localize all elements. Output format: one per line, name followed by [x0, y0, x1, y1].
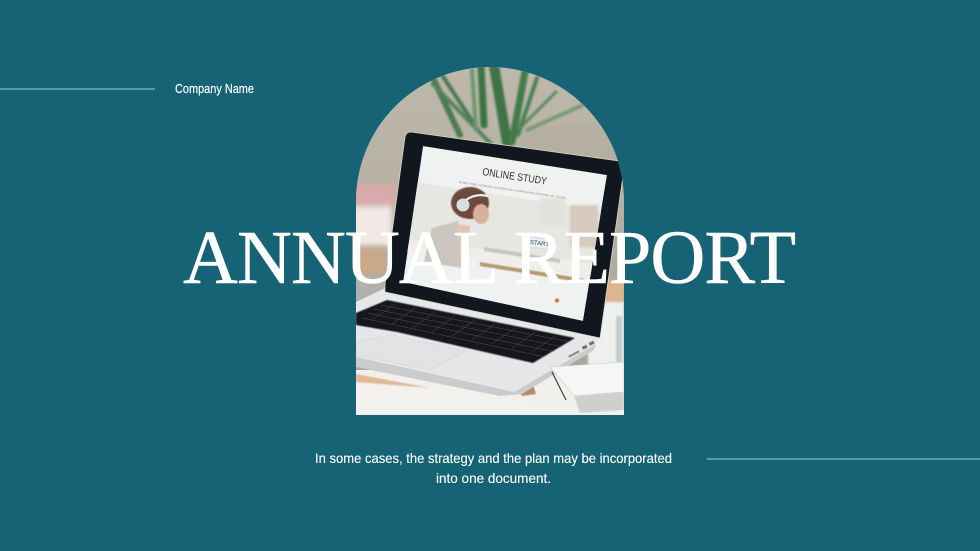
site heading: ONLINE STUDY [482, 166, 548, 188]
laptop lid [385, 132, 624, 338]
photo backdrop [352, 67, 624, 415]
trackpad [356, 335, 465, 370]
laptop base [356, 288, 600, 396]
woman hair [451, 187, 489, 219]
orange dot [555, 298, 559, 303]
description text: In some cases, the strategy and the plan may be incorporated [315, 450, 672, 466]
notebook [550, 362, 624, 413]
site navigation: HOME FREE COURSES SCHEDULED COURSES EDUCATORS MY STUDY [459, 180, 566, 200]
keyboard [356, 300, 575, 363]
woman body [424, 221, 462, 268]
top left divider line [0, 88, 155, 90]
description text: into one document. [436, 470, 551, 486]
cover slide [0, 67, 980, 483]
site photo: START [530, 240, 550, 249]
company name: Company Name [175, 81, 254, 96]
ports [568, 350, 580, 358]
headphones [456, 198, 470, 212]
title: ANNUAL REPORT [183, 216, 796, 300]
bottom right divider line [707, 458, 980, 460]
woman face [473, 204, 489, 224]
arch photo: laptop on desk [352, 66, 624, 415]
plant [433, 66, 583, 145]
description text [315, 450, 672, 486]
site photo [404, 182, 602, 283]
laptop screen [403, 146, 607, 321]
start sign [530, 236, 548, 250]
